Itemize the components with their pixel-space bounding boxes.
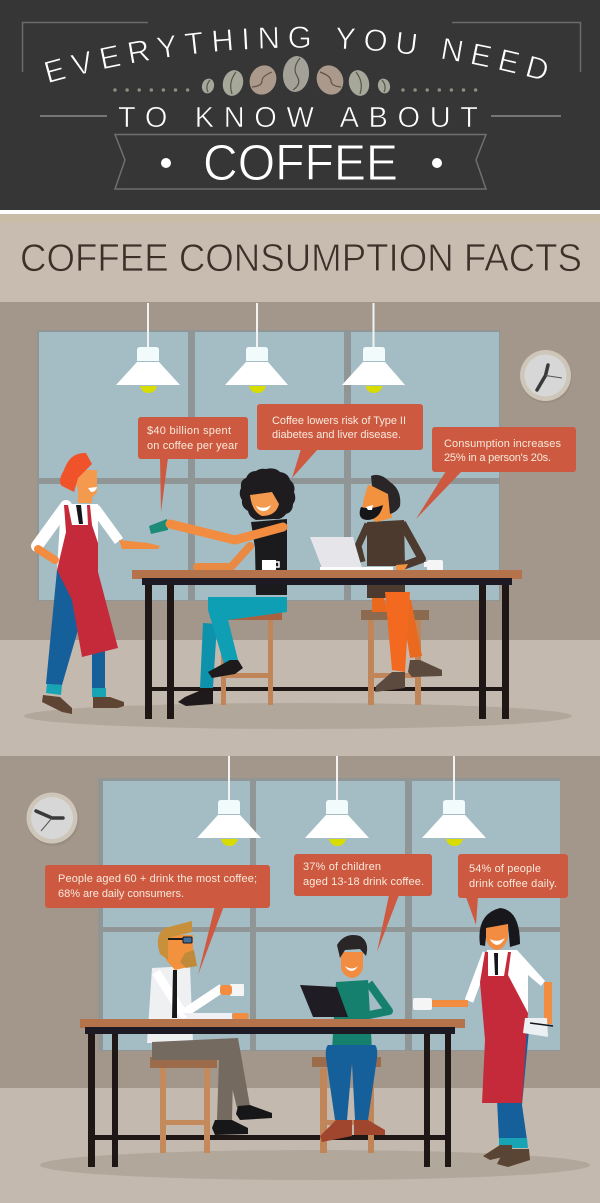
barista apron <box>57 505 118 657</box>
bearded customer figure <box>310 475 443 692</box>
customer cup <box>262 560 276 572</box>
boy laptop <box>300 985 348 1017</box>
boy trousers <box>326 1045 377 1120</box>
ribbon dots <box>161 158 442 168</box>
table top <box>132 570 522 585</box>
cash <box>149 519 168 534</box>
barista shirt <box>487 950 545 1013</box>
barista apron <box>480 952 528 1103</box>
stool right <box>312 1057 381 1153</box>
panel: scene one cafe <box>0 302 600 756</box>
window <box>98 778 560 1051</box>
wall <box>0 302 600 640</box>
barista head <box>479 908 520 947</box>
cup <box>427 560 443 571</box>
frame corners <box>22 22 580 72</box>
lamp three <box>342 303 405 393</box>
callout: age sixty: People aged 60 + drink the most coffee; <box>58 873 257 885</box>
callout: children <box>294 854 432 952</box>
lamp one <box>116 303 180 393</box>
table legs <box>88 1028 451 1167</box>
callout: twenties: 25% in a person's 20s. <box>444 452 551 464</box>
older man shoes <box>212 1105 272 1135</box>
boy shoes <box>320 1120 385 1142</box>
older man shirt <box>147 966 193 1043</box>
lamp one <box>197 756 261 846</box>
callout: age sixty: 68% are daily consumers. <box>58 888 184 900</box>
table legs <box>145 580 509 719</box>
panel: scene two cafe <box>0 756 600 1203</box>
barista head <box>72 470 97 503</box>
callout: twenties: Consumption increases <box>444 438 562 450</box>
barista tie <box>76 505 83 524</box>
brown sweater <box>367 520 405 566</box>
stool right <box>361 610 429 705</box>
female barista figure <box>413 908 553 1167</box>
customer torso <box>251 519 287 595</box>
older man tie <box>172 970 177 1018</box>
callout: health <box>257 404 423 478</box>
callout: children: aged 13-18 drink coffee. <box>303 876 424 888</box>
barista shirt and arms <box>57 504 98 570</box>
customer face <box>250 492 279 516</box>
header panel <box>22 22 582 191</box>
older man arms <box>156 972 222 1014</box>
boy figure <box>300 935 389 1142</box>
boy head <box>341 952 363 978</box>
callout: daily <box>458 854 568 925</box>
older man head <box>166 935 197 970</box>
barista trousers <box>46 570 78 685</box>
stool left <box>221 612 282 705</box>
barista tie <box>494 953 498 975</box>
ribbon title: COFFEE <box>203 134 398 191</box>
customer trousers <box>200 623 217 688</box>
orange trousers <box>367 585 405 598</box>
callout: daily: drink coffee daily. <box>469 878 557 890</box>
barista trousers <box>497 1030 529 1140</box>
icon: coffee beans row <box>200 55 392 99</box>
barista shoes <box>483 1145 530 1167</box>
male barista figure <box>37 453 168 714</box>
floor shadow <box>24 703 572 729</box>
callout: children: 37% of children <box>303 861 381 873</box>
floor <box>0 1088 600 1203</box>
laptop <box>310 537 362 568</box>
lamp two <box>225 303 288 393</box>
dotted dividers <box>115 88 476 92</box>
barista shoes <box>42 695 124 714</box>
window <box>37 330 500 601</box>
ribbon <box>115 134 486 189</box>
lamp two <box>305 756 369 846</box>
boy sweater <box>332 980 372 1050</box>
older man trousers <box>152 1038 250 1120</box>
curved heading: EVERYTHING YOU NEED <box>44 26 548 82</box>
callout: spending <box>138 417 248 512</box>
order pad <box>523 1018 548 1037</box>
wall <box>0 756 600 1088</box>
subheading: TO KNOW ABOUT <box>118 102 478 134</box>
head and hair <box>362 485 392 522</box>
female customer figure <box>170 468 295 706</box>
customer hair <box>240 468 295 520</box>
callout: health: diabetes and liver disease. <box>272 429 401 441</box>
customer shoes <box>178 660 243 706</box>
lamp three <box>422 756 486 846</box>
icon: wall clock <box>26 792 79 846</box>
callout: spending: $40 billion spent <box>147 425 231 437</box>
table top <box>80 1019 465 1034</box>
callout: health: Coffee lowers risk of Type II <box>272 415 406 427</box>
icon: wall clock <box>520 350 572 403</box>
hand <box>396 564 408 571</box>
older man hand and cup <box>230 984 244 996</box>
callout: daily: 54% of people <box>469 863 541 875</box>
floor shadow <box>40 1150 590 1180</box>
shoes <box>375 660 442 692</box>
callout: spending: on coffee per year <box>147 440 238 452</box>
customer arms <box>170 524 283 540</box>
section title band <box>0 210 600 302</box>
side rules <box>40 115 561 117</box>
floor <box>0 640 600 756</box>
callout: twenties <box>416 427 576 519</box>
barista arms <box>432 1000 468 1007</box>
older man figure <box>147 921 272 1135</box>
callout: age sixty <box>45 865 270 975</box>
stool left <box>150 1057 217 1153</box>
